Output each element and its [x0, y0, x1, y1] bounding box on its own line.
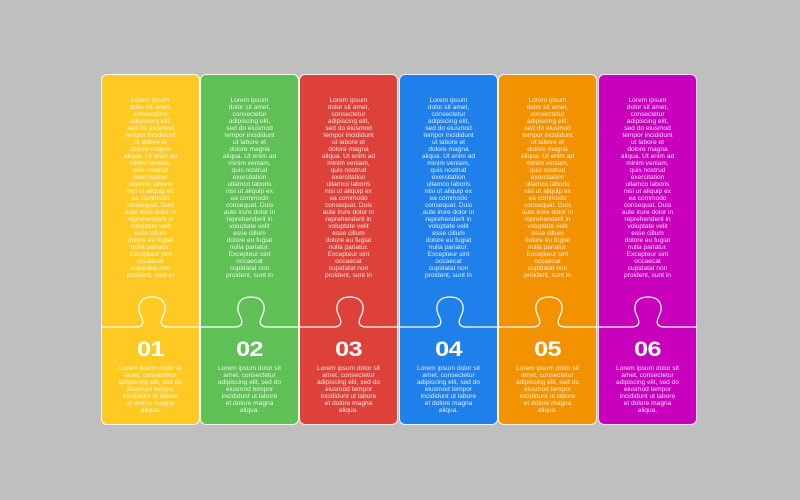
body text 05: tempor incididunt	[522, 132, 573, 139]
body text 06: sed do eiusmod	[624, 125, 671, 132]
footer text 03: aliqua.	[339, 407, 358, 414]
footer text 02: aliqua.	[240, 407, 259, 414]
body text 06: aute irure dolor in	[622, 209, 673, 216]
footer text 06: incididunt ut labore	[620, 393, 675, 400]
body text 04	[422, 97, 475, 279]
body text 04: tempor incididunt	[423, 132, 474, 139]
panel: 02 green	[200, 74, 299, 425]
body text 03: dolor sit amet,	[328, 104, 369, 111]
body text 02: tempor incididunt	[224, 132, 275, 139]
body text 01: reprehenderit in	[127, 216, 174, 223]
body text 04: dolore eu fugiat	[426, 237, 471, 244]
body text 05: dolore eu fugiat	[525, 237, 570, 244]
footer text 05: Lorem ipsum dolor sit	[516, 365, 579, 372]
body text 06: dolor sit amet,	[627, 104, 668, 111]
body text 04: quis nostrud	[431, 167, 466, 174]
body text 06: minim veniam,	[626, 160, 669, 167]
footer text 06	[616, 365, 679, 414]
footer text 04: adipiscing elit, sed do	[417, 379, 480, 386]
body text 04: ullamco laboris	[426, 181, 470, 188]
number 02: 02	[236, 338, 263, 361]
body text 04: dolor sit amet,	[428, 104, 469, 111]
body text 03: dolore magna	[328, 146, 369, 153]
footer text 01: incididunt ut labore	[123, 393, 178, 400]
body text 01: sed do eiusmod	[127, 125, 174, 132]
number 04: 04	[435, 338, 462, 361]
body text 01: adipiscing elit,	[130, 118, 171, 125]
body text 02: voluptate velit	[229, 223, 270, 230]
body text 06: aliqua. Ut enim ad	[621, 153, 674, 160]
body text 02: cupidatat non	[230, 265, 269, 272]
footer text 01: eiusmod tempor	[127, 386, 174, 393]
body text 06: cupidatat non	[628, 265, 667, 272]
body text 04: voluptate velit	[428, 223, 469, 230]
body text 06: dolore eu fugiat	[625, 237, 670, 244]
body text 02: ea commodo	[230, 195, 269, 202]
body text 03: Lorem ipsum	[329, 97, 368, 104]
body text 05: quis nostrud	[530, 167, 565, 174]
body text 02: quis nostrud	[232, 167, 267, 174]
body text 02: reprehenderit in	[226, 216, 273, 223]
body text 06: proident, sunt in	[624, 272, 671, 279]
body text 01	[124, 97, 177, 279]
body text 01: ea commodo	[131, 195, 170, 202]
body text 02: dolore eu fugiat	[227, 237, 272, 244]
footer text 01	[119, 365, 182, 414]
body text 01: dolor sit amet,	[130, 104, 171, 111]
footer text 03: incididunt ut labore	[321, 393, 376, 400]
panel: 04 blue	[399, 74, 498, 425]
footer text 01: adipiscing elit, sed do	[119, 379, 182, 386]
body text 03: aliqua. Ut enim ad	[322, 153, 375, 160]
body text 04: proident, sunt in	[425, 272, 472, 279]
body text 02: dolor sit amet,	[229, 104, 270, 111]
body text 01: esse cillum	[134, 230, 167, 237]
body text 05: Lorem ipsum	[528, 97, 567, 104]
footer text 02: Lorem ipsum dolor sit	[218, 365, 281, 372]
panel: 05 orange	[498, 74, 597, 425]
footer text 02	[218, 365, 281, 414]
body text 04: consequat. Duis	[425, 202, 472, 209]
footer text 05: incididunt ut labore	[520, 393, 575, 400]
body text 04: minim veniam,	[427, 160, 470, 167]
body text 06: quis nostrud	[630, 167, 665, 174]
footer text 05: aliqua.	[538, 407, 557, 414]
body text 02: minim veniam,	[228, 160, 271, 167]
body text 03: consequat. Duis	[325, 202, 372, 209]
body text 01: Lorem ipsum	[131, 97, 170, 104]
footer text 05: et dolore magna	[524, 400, 571, 407]
body text 01: minim veniam,	[129, 160, 172, 167]
body text 04: sed do eiusmod	[425, 125, 472, 132]
body text 05: exercitation	[531, 174, 564, 181]
body text 03: Excepteur sint	[328, 251, 369, 258]
body text 03: ea commodo	[329, 195, 368, 202]
footer text 03: Lorem ipsum dolor sit	[317, 365, 380, 372]
body text 06: voluptate velit	[627, 223, 668, 230]
footer text 04: aliqua.	[439, 407, 458, 414]
body text 01: occaecat	[137, 258, 164, 265]
body text 04: Lorem ipsum	[429, 97, 468, 104]
footer text 01: aliqua.	[141, 407, 160, 414]
footer text 06: aliqua.	[638, 407, 657, 414]
body text 06: ullamco laboris	[626, 181, 669, 188]
body text 02: Excepteur sint	[229, 251, 270, 258]
body text 02: aute irure dolor in	[224, 209, 275, 216]
footer text 03	[317, 365, 380, 414]
footer text 02: et dolore magna	[226, 400, 273, 407]
body text 06: reprehenderit in	[624, 216, 671, 223]
number 05: 05	[534, 338, 561, 361]
body text 02: nulla pariatur.	[230, 244, 269, 251]
footer text 02: incididunt ut labore	[222, 393, 277, 400]
body text 05: ea commodo	[528, 195, 567, 202]
body text 04: adipiscing elit,	[428, 118, 469, 125]
body text 03: exercitation	[332, 174, 365, 181]
body text 04: nisi ut aliquip ex	[425, 188, 472, 195]
body text 04: occaecat	[435, 258, 462, 265]
body text 05: minim veniam,	[526, 160, 569, 167]
number 03: 03	[335, 338, 362, 361]
body text 06: consectetur	[630, 111, 665, 118]
body text 02: nisi ut aliquip ex	[226, 188, 273, 195]
number 06: 06	[634, 338, 661, 361]
footer text 02: adipiscing elit, sed do	[218, 379, 281, 386]
footer text 01: amet, consectetur	[124, 372, 177, 379]
body text 05: Excepteur sint	[527, 251, 568, 258]
body text 06	[621, 97, 674, 279]
body text 03: cupidatat non	[329, 265, 368, 272]
body text 02: consequat. Duis	[226, 202, 273, 209]
body text 03: consectetur	[331, 111, 366, 118]
footer text 03: amet, consectetur	[322, 372, 375, 379]
body text 04: cupidatat non	[429, 265, 468, 272]
body text 06: tempor incididunt	[622, 132, 673, 139]
body text 04: esse cillum	[432, 230, 465, 237]
body text 06: nisi ut aliquip ex	[624, 188, 671, 195]
body text 02: ullamco laboris	[228, 181, 271, 188]
body text 05: aliqua. Ut enim ad	[521, 153, 574, 160]
body text 05: esse cillum	[531, 230, 564, 237]
body text 02: sed do eiusmod	[226, 125, 273, 132]
body text 02: consectetur	[232, 111, 267, 118]
footer text 04	[417, 365, 480, 414]
body text 04: aliqua. Ut enim ad	[422, 153, 475, 160]
panel: 01 yellow	[101, 74, 200, 425]
body text 01: ut labore et	[134, 139, 167, 146]
body text 04: nulla pariatur.	[429, 244, 468, 251]
body text 05: consectetur	[530, 111, 565, 118]
footer text 04: et dolore magna	[425, 400, 472, 407]
body text 03: esse cillum	[332, 230, 365, 237]
body text 03: occaecat	[335, 258, 362, 265]
body text 01: cupidatat non	[131, 265, 170, 272]
body text 03: proident, sunt in	[325, 272, 372, 279]
body text 06: Excepteur sint	[627, 251, 668, 258]
body text 06: consequat. Duis	[624, 202, 671, 209]
body text 01: Excepteur sint	[130, 251, 171, 258]
footer text 06: et dolore magna	[624, 400, 671, 407]
body text 02	[223, 97, 276, 279]
body text 04: reprehenderit in	[425, 216, 472, 223]
body text 04: exercitation	[432, 174, 465, 181]
body text 02: ut labore et	[233, 139, 266, 146]
footer text 03: adipiscing elit, sed do	[317, 379, 380, 386]
body text 04: ea commodo	[429, 195, 468, 202]
body text 05: nulla pariatur.	[528, 244, 567, 251]
body text 01: voluptate velit	[130, 223, 171, 230]
body text 03	[322, 97, 375, 279]
body text 04: ut labore et	[432, 139, 465, 146]
body text 05: dolor sit amet,	[527, 104, 568, 111]
body text 03: voluptate velit	[328, 223, 369, 230]
body text 06: Lorem ipsum	[628, 97, 667, 104]
body text 03: ullamco laboris	[326, 181, 370, 188]
body text 06: exercitation	[631, 174, 664, 181]
body text 06: esse cillum	[631, 230, 664, 237]
body text 03: aute irure dolor in	[323, 209, 374, 216]
panel: 03 red	[299, 74, 398, 425]
body text 01: aliqua. Ut enim ad	[124, 153, 177, 160]
body text 05: cupidatat non	[528, 265, 567, 272]
body text 05: voluptate velit	[527, 223, 568, 230]
body text 05: aute irure dolor in	[522, 209, 573, 216]
footer text 06: adipiscing elit, sed do	[616, 379, 679, 386]
body text 02: Lorem ipsum	[230, 97, 269, 104]
body text 04: Excepteur sint	[428, 251, 469, 258]
body text 01: ullamco laboris	[128, 181, 172, 188]
body text 05: occaecat	[534, 258, 561, 265]
footer text 04: Lorem ipsum dolor sit	[417, 365, 480, 372]
body text 01: dolore magna	[130, 146, 171, 153]
body text 03: tempor incididunt	[323, 132, 374, 139]
body text 06: occaecat	[634, 258, 661, 265]
body text 05	[521, 97, 574, 279]
body text 05: sed do eiusmod	[524, 125, 571, 132]
body text 06: dolore magna	[627, 146, 668, 153]
panel: 06 magenta	[598, 74, 697, 425]
body text 05: adipiscing elit,	[527, 118, 568, 125]
body text 02: adipiscing elit,	[229, 118, 270, 125]
footer text 02: amet, consectetur	[223, 372, 276, 379]
footer text 05: eiusmod tempor	[524, 386, 571, 393]
body text 02: esse cillum	[233, 230, 266, 237]
body text 03: ut labore et	[332, 139, 365, 146]
body text 04: consectetur	[431, 111, 466, 118]
footer text 03: eiusmod tempor	[325, 386, 372, 393]
footer text 01: et dolore magna	[127, 400, 174, 407]
body text 04: dolore magna	[428, 146, 469, 153]
body text 05: ullamco laboris	[526, 181, 569, 188]
body text 05: reprehenderit in	[524, 216, 571, 223]
body text 01: aute irure dolor in	[125, 209, 176, 216]
body text 06: nulla pariatur.	[628, 244, 667, 251]
body text 03: reprehenderit in	[325, 216, 372, 223]
body text 06: ea commodo	[628, 195, 667, 202]
body text 03: dolore eu fugiat	[326, 237, 371, 244]
body text 02: occaecat	[236, 258, 263, 265]
number 01: 01	[137, 338, 164, 361]
footer text 03: et dolore magna	[325, 400, 372, 407]
body text 06: ut labore et	[631, 139, 664, 146]
body text 03: adipiscing elit,	[328, 118, 369, 125]
body text 01: nulla pariatur.	[131, 244, 170, 251]
body text 03: nisi ut aliquip ex	[325, 188, 372, 195]
footer text 04: eiusmod tempor	[425, 386, 472, 393]
body text 02: proident, sunt in	[226, 272, 273, 279]
footer text 05: adipiscing elit, sed do	[516, 379, 579, 386]
footer text 05: amet, consectetur	[521, 372, 574, 379]
footer text 06: eiusmod tempor	[624, 386, 671, 393]
body text 02: aliqua. Ut enim ad	[223, 153, 276, 160]
body text 01: quis nostrud	[133, 167, 168, 174]
body text 01: consequat. Duis	[127, 202, 174, 209]
footer text 04: amet, consectetur	[422, 372, 475, 379]
body text 03: minim veniam,	[327, 160, 370, 167]
body text 04: aute irure dolor in	[423, 209, 474, 216]
body text 06: adipiscing elit,	[627, 118, 668, 125]
body text 03: sed do eiusmod	[325, 125, 372, 132]
body text 01: nisi ut aliquip ex	[127, 188, 174, 195]
body text 05: proident, sunt in	[524, 272, 571, 279]
body text 05: consequat. Duis	[524, 202, 571, 209]
footer text 05	[516, 365, 579, 414]
body text 01: tempor incididunt	[125, 132, 176, 139]
body text 05: dolore magna	[527, 146, 568, 153]
body text 01: dolore eu fugiat	[128, 237, 173, 244]
body text 02: exercitation	[233, 174, 266, 181]
footer text 01: Lorem ipsum dolor sit	[119, 365, 182, 372]
body text 02: dolore magna	[229, 146, 270, 153]
body text 05: nisi ut aliquip ex	[524, 188, 571, 195]
body text 03: quis nostrud	[331, 167, 366, 174]
body text 01: consectetur	[133, 111, 168, 118]
body text 03: nulla pariatur.	[329, 244, 368, 251]
footer text 04: incididunt ut labore	[421, 393, 476, 400]
footer text 06: Lorem ipsum dolor sit	[616, 365, 679, 372]
footer text 06: amet, consectetur	[621, 372, 674, 379]
body text 05: ut labore et	[531, 139, 564, 146]
body text 01: proident, sunt in	[127, 272, 174, 279]
footer text 02: eiusmod tempor	[226, 386, 273, 393]
body text 01: exercitation	[134, 174, 167, 181]
